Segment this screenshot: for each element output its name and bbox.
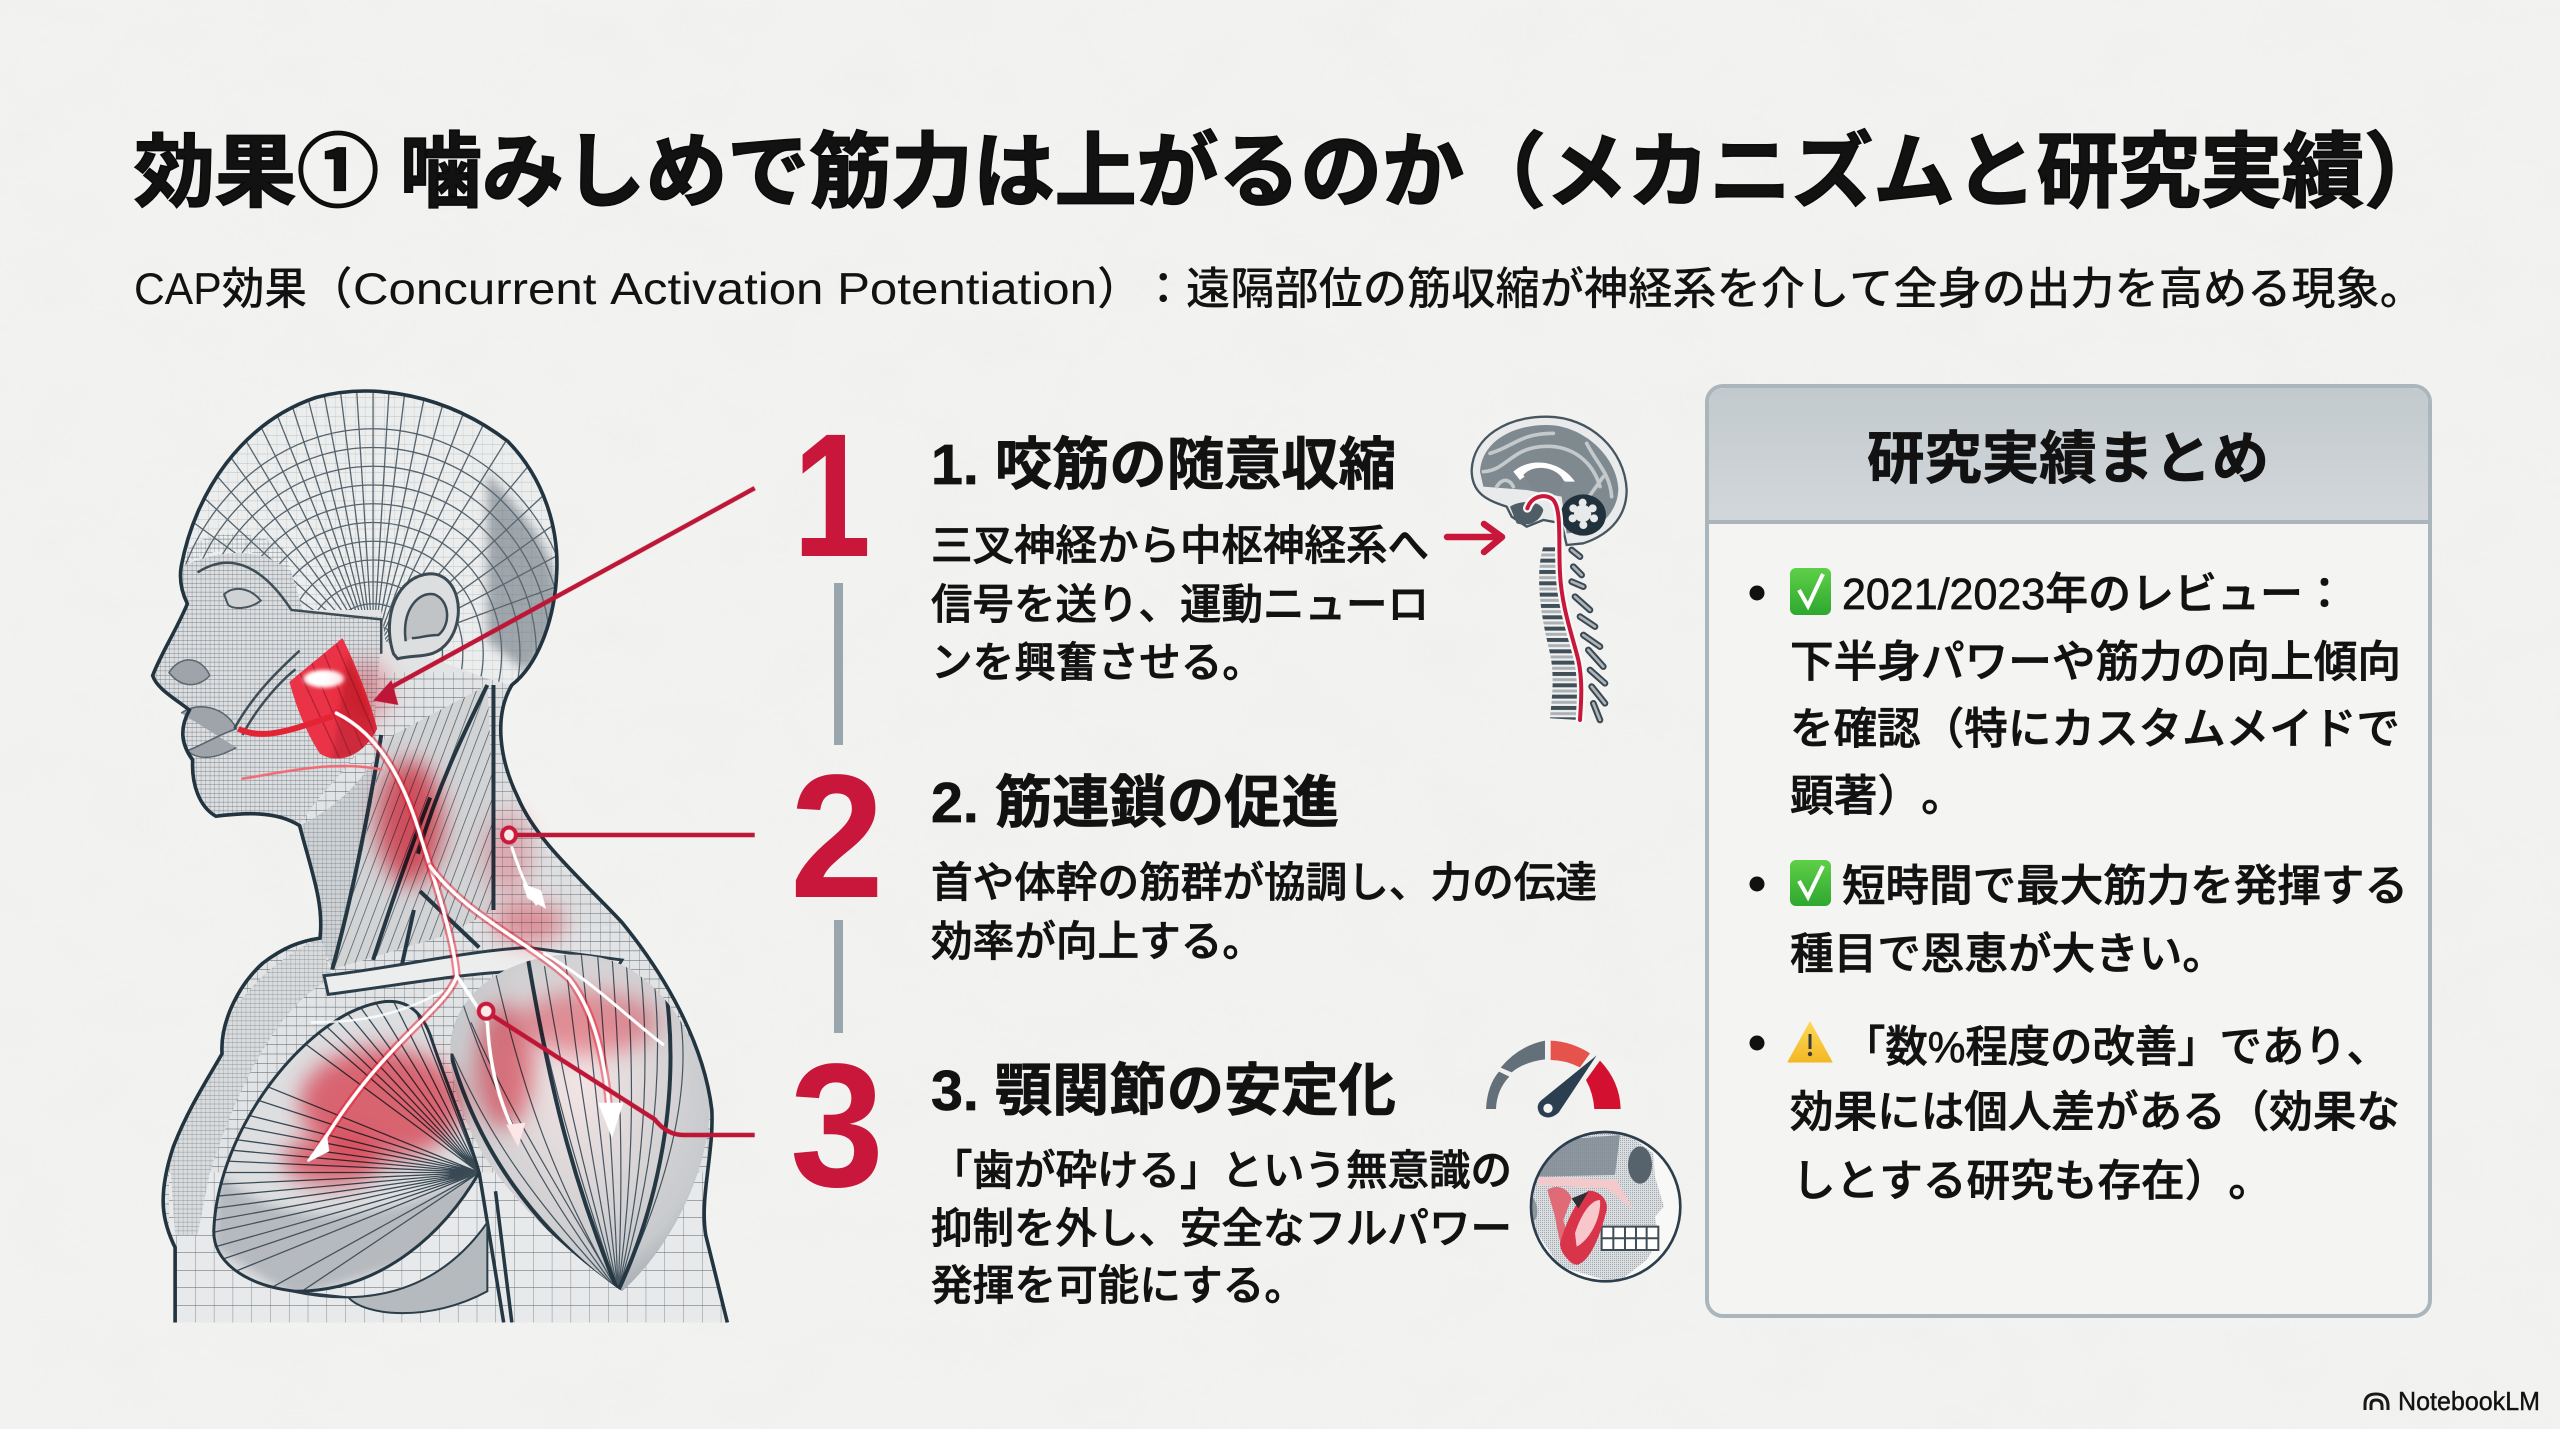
connector 1 to 2 xyxy=(834,583,843,745)
step 3 text xyxy=(931,1059,1512,1309)
leader line 2 xyxy=(502,828,755,842)
step 1 body: ンを興奮させる。 xyxy=(931,639,1264,686)
step 1 body: 三叉神経から中枢神経系へ xyxy=(931,522,1429,569)
step 3 body: 抑制を外し、安全なフルパワー xyxy=(931,1205,1512,1252)
face mesh xyxy=(153,553,381,826)
title: 噛みしめで筋力は上がるのか（メカニズムと研究実績） xyxy=(400,127,2446,218)
leader line 1 with arrowhead xyxy=(373,488,755,705)
bullet xyxy=(1750,1036,1764,1050)
subtitle: Concurrent Activation Potentiation xyxy=(353,265,1097,314)
icon: warning triangle xyxy=(1788,1022,1832,1062)
connector 2 to 3 xyxy=(834,920,843,1033)
subtitle: ） xyxy=(1097,265,1142,314)
masseter muscle highlight xyxy=(237,638,378,759)
bullet xyxy=(1750,586,1764,600)
panel frame xyxy=(1707,386,2430,1316)
icon: NotebookLM arcs xyxy=(2365,1394,2388,1410)
body base fill and mesh xyxy=(165,608,710,1317)
item 3 text: しとする研究も存在）。 xyxy=(1792,1158,2272,1206)
step 2 body: 効率が向上する。 xyxy=(931,918,1264,965)
item 3 text: 効果には個人差がある（効果な xyxy=(1790,1089,2400,1137)
panel heading: 研究実績まとめ xyxy=(1867,427,2269,491)
step 3 body: 「歯が砕ける」という無意識の xyxy=(931,1147,1512,1194)
subtitle xyxy=(134,265,2424,314)
step 2 body xyxy=(931,859,1597,965)
nerve pathways with arrows xyxy=(242,713,663,1161)
ear xyxy=(389,574,458,659)
step 3 body: 発揮を可能にする。 xyxy=(931,1262,1306,1309)
body outline xyxy=(153,391,727,1323)
lower torso and collar xyxy=(169,938,732,1329)
neck muscles striped xyxy=(300,685,620,969)
step 3 body xyxy=(931,1147,1512,1309)
subtitle: （ xyxy=(308,265,353,314)
panel header band xyxy=(1707,388,2430,524)
red activation glows xyxy=(283,660,659,1185)
icon: green check xyxy=(1790,568,1831,615)
item 2 xyxy=(1750,860,2408,979)
leader line 3 xyxy=(479,1004,755,1135)
icon: jaw joint skull in circle xyxy=(1528,1132,1680,1283)
icon: green check xyxy=(1790,860,1831,906)
step 3 heading: 3. 顎関節の安定化 xyxy=(931,1059,1396,1123)
item 1 text: 下半身パワーや筋力の向上傾向 xyxy=(1790,639,2401,687)
item 1 text: を確認（特にカスタムメイドで xyxy=(1790,706,2400,754)
step 1 heading: 1. 咬筋の随意収縮 xyxy=(931,433,1396,497)
step 2 heading: 2. 筋連鎖の促進 xyxy=(931,771,1339,835)
step number 3: 3 xyxy=(790,1028,884,1224)
step 2 text xyxy=(931,771,1597,965)
wordmark: NotebookLM xyxy=(2398,1386,2540,1416)
step 1 body: 信号を送り、運動ニューロ xyxy=(931,581,1429,628)
title: ① xyxy=(297,128,379,217)
step 2 body: 首や体幹の筋群が協調し、力の伝達 xyxy=(931,859,1597,906)
subtitle: ： xyxy=(1141,265,1186,314)
panel: research summary xyxy=(1707,386,2430,1316)
step 1 text xyxy=(931,433,1429,686)
spinal cord red line xyxy=(1527,496,1581,720)
icon: power gauge xyxy=(1486,1041,1621,1118)
subtitle: CAP効果 xyxy=(134,265,307,314)
spine xyxy=(1539,547,1605,720)
icon: red arrow to brain xyxy=(1447,524,1502,552)
subtitle: 遠隔部位の筋収縮が神経系を介して全身の出力を高める現象。 xyxy=(1186,265,2424,314)
item 2 text xyxy=(1790,863,2408,979)
step number 2: 2 xyxy=(790,739,884,935)
pectoral outline xyxy=(214,1001,479,1291)
footer: NotebookLM logo xyxy=(2365,1386,2540,1416)
step number 1: 1 xyxy=(793,398,871,594)
item 2 text: 短時間で最大筋力を発揮する xyxy=(1842,863,2408,911)
item 1 xyxy=(1750,568,2401,821)
item 2 text: 種目で恩恵が大きい。 xyxy=(1790,931,2226,979)
brain xyxy=(1472,417,1627,545)
item 1 text: 2021/2023年のレビュー： xyxy=(1842,571,2346,619)
pectoral muscle fan xyxy=(215,1003,478,1290)
anatomy figure: head, neck and shoulder with red activation xyxy=(153,379,755,1329)
item 1 text: 顕著）。 xyxy=(1790,773,1965,821)
item 1 text xyxy=(1790,571,2401,821)
title: 効果 xyxy=(134,128,296,217)
skull mesh xyxy=(183,392,555,684)
deltoid arm muscle xyxy=(450,954,710,1291)
step 1 body xyxy=(931,522,1429,686)
icon: brain and spinal cord xyxy=(1472,417,1627,720)
item 3 text xyxy=(1790,1024,2400,1206)
item 3 xyxy=(1750,1022,2400,1206)
bullet xyxy=(1750,876,1764,892)
item 3 text: 「数%程度の改善」であり、 xyxy=(1843,1024,2389,1072)
